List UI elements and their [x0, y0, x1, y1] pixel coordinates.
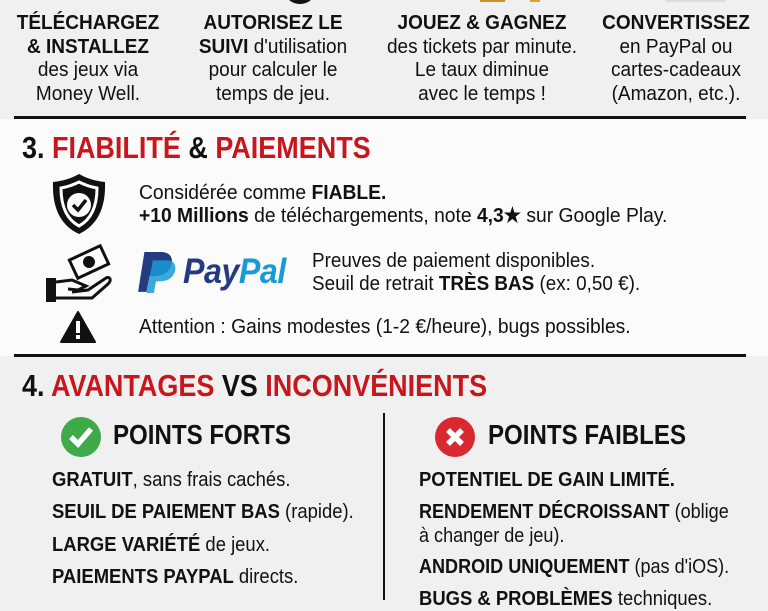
- step 1 text: des jeux via: [38, 59, 138, 81]
- step 4 text: [602, 12, 750, 104]
- logo: PayPal: [138, 252, 287, 293]
- text: payments: Seuil de retrait TRÈS BAS (ex: 0,50 €).: [312, 272, 640, 295]
- step 2 text: temps de jeu.: [216, 82, 330, 104]
- text: payments: Preuves de paiement disponibles.: [312, 249, 595, 272]
- text: reliability: Considérée comme FIABLE.: [139, 181, 386, 204]
- heading: points forts: POINTS FORTS: [113, 419, 291, 450]
- step 4 text: (Amazon, etc.).: [612, 82, 740, 104]
- list: cons: RENDEMENT DÉCROISSANT (oblige: [419, 500, 729, 523]
- text: warning: Attention : Gains modestes (1-2 €/heure), bugs possibles.: [139, 315, 631, 338]
- panel: points faibles: [419, 417, 729, 610]
- icon: cross: [435, 417, 475, 457]
- step 3 text: JOUEZ & GAGNEZ: [398, 12, 566, 34]
- step 1 text: [16, 11, 159, 104]
- icon: money hand: [46, 244, 112, 302]
- text: reliability: [139, 181, 667, 227]
- step 1 text: & INSTALLEZ: [27, 36, 149, 58]
- step 1 text: Money Well.: [36, 82, 140, 104]
- section 3 background: [0, 119, 768, 356]
- step 3 text: des tickets par minute.: [387, 36, 577, 58]
- list: cons: BUGS & PROBLÈMES techniques.: [419, 587, 712, 610]
- panel: points forts: [52, 417, 354, 588]
- logo: PayPal: PayPal: [183, 252, 286, 291]
- list: pros: SEUIL DE PAIEMENT BAS (rapide).: [52, 500, 354, 523]
- list: pros: PAIEMENTS PAYPAL directs.: [52, 565, 298, 588]
- step 2 text: [199, 12, 347, 104]
- step 3 text: [387, 12, 577, 104]
- icon: warning: [60, 311, 96, 343]
- step 4 text: cartes-cadeaux: [611, 59, 741, 81]
- list: pros: [52, 468, 354, 588]
- step 2 text: SUIVI d'utilisation: [199, 36, 347, 58]
- heading: section 3: 3. FIABILITÉ & PAIEMENTS: [22, 130, 371, 165]
- step 3 text: Le taux diminue: [415, 59, 549, 81]
- list: cons: POTENTIEL DE GAIN LIMITÉ.: [419, 468, 675, 491]
- list: pros: LARGE VARIÉTÉ de jeux.: [52, 533, 270, 556]
- list: pros: GRATUIT, sans frais cachés.: [52, 468, 291, 491]
- list: cons: ANDROID UNIQUEMENT (pas d'iOS).: [419, 555, 729, 578]
- text: reliability: +10 Millions de téléchargements, note 4,3★ sur Google Play.: [139, 204, 667, 227]
- top partial icons: [289, 0, 725, 4]
- text: payments: [312, 249, 640, 295]
- heading: section 4: 4. AVANTAGES VS INCONVÉNIENTS: [22, 368, 487, 403]
- step 2 text: pour calculer le: [209, 59, 337, 81]
- step 3 text: avec le temps !: [418, 82, 546, 104]
- step 4 text: CONVERTISSEZ: [602, 12, 750, 34]
- heading: points faibles: POINTS FAIBLES: [488, 419, 686, 450]
- step 2 text: AUTORISEZ LE: [204, 12, 342, 34]
- icon: shield: [52, 174, 106, 234]
- step 1 text: TÉLÉCHARGEZ: [17, 12, 159, 34]
- list: cons: [419, 468, 729, 610]
- step 4 text: en PayPal ou: [619, 36, 733, 58]
- icon: check: [61, 417, 101, 457]
- list: cons: à changer de jeu).: [419, 524, 564, 547]
